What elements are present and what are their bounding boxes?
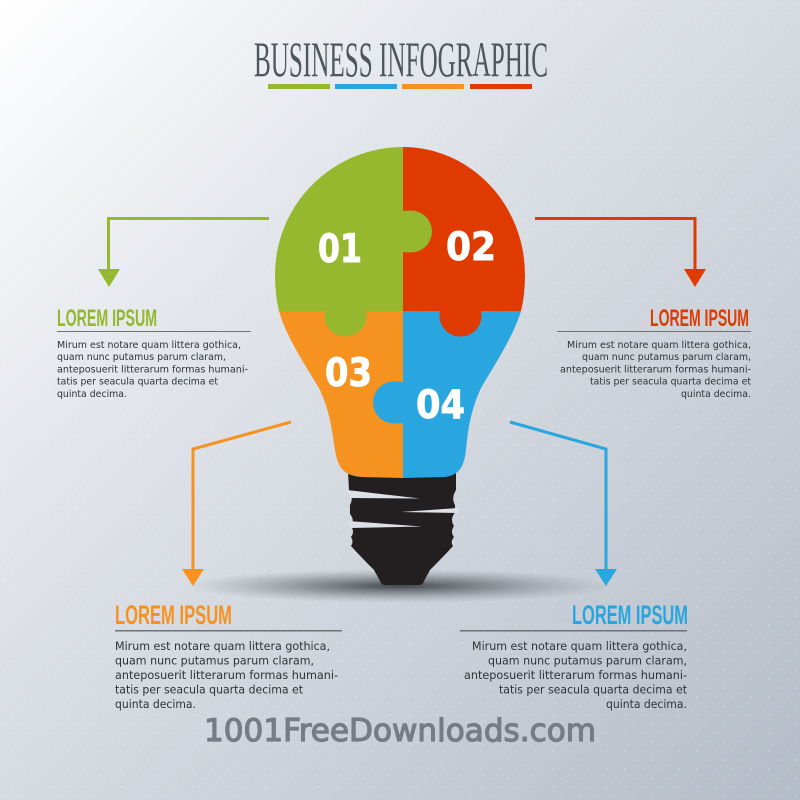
body text: tatis per seacula quarta decima et: [590, 376, 751, 388]
body text: [115, 639, 338, 711]
knob 04 into 03: [373, 382, 403, 424]
number 01: 01: [318, 227, 362, 272]
body text: quinta decima.: [115, 697, 196, 711]
heading: LOREM IPSUM: [57, 305, 157, 332]
body text: tatis per seacula quarta decima et: [499, 682, 687, 696]
heading: LOREM IPSUM: [115, 600, 232, 630]
lightbulb: [275, 147, 525, 585]
body text: Mirum est notare quam littera gothica,: [567, 340, 751, 351]
puzzle piece 02 red: [403, 147, 525, 311]
panel: orange text block: [115, 600, 342, 711]
arrow: orange: [182, 422, 291, 586]
knob 01 into 02: [403, 210, 432, 252]
body text: tatis per seacula quarta decima et: [115, 682, 303, 696]
knob 01 into 03: [324, 311, 366, 337]
panel: green text block: [57, 305, 251, 400]
body text: anteposuerit litterarum formas humani-: [57, 364, 248, 376]
arrow: green: [98, 218, 269, 287]
number 03: 03: [325, 351, 372, 396]
body text: quinta decima.: [606, 697, 687, 711]
body text: tatis per seacula quarta decima et: [57, 376, 218, 388]
number 04: 04: [416, 383, 465, 428]
body text: [464, 639, 687, 711]
body text: quam nunc putamus parum claram,: [488, 654, 687, 668]
arrow: red: [535, 218, 706, 287]
puzzle piece 03 orange: [279, 311, 403, 478]
body text: anteposuerit litterarum formas humani-: [560, 364, 751, 376]
watermark: 1001FreeDownloads.com: [204, 713, 596, 749]
body text: quam nunc putamus parum claram,: [57, 352, 226, 363]
body text: quam nunc putamus parum claram,: [115, 654, 314, 668]
panel: red text block: [557, 305, 751, 400]
title colour bars: [268, 84, 532, 89]
puzzle piece 04 blue: [403, 311, 521, 478]
panel: blue text block: [460, 600, 688, 711]
body text: anteposuerit litterarum formas humani-: [115, 668, 338, 682]
knob 02 into 04: [439, 311, 482, 337]
body text: anteposuerit litterarum formas humani-: [464, 668, 687, 682]
arrow: blue: [510, 422, 617, 586]
body text: Mirum est notare quam littera gothica,: [115, 639, 330, 653]
heading: LOREM IPSUM: [572, 600, 688, 630]
number 02: 02: [446, 225, 496, 270]
body text: quinta decima.: [681, 389, 751, 400]
body text: quinta decima.: [57, 389, 127, 400]
body text: [57, 340, 248, 400]
puzzle piece 01 green: [275, 147, 403, 311]
body text: [560, 340, 751, 400]
bulb base: [347, 472, 458, 585]
floor shadow: [185, 569, 615, 603]
body text: Mirum est notare quam littera gothica,: [472, 639, 687, 653]
body text: quam nunc putamus parum claram,: [582, 352, 751, 363]
body text: Mirum est notare quam littera gothica,: [57, 340, 241, 351]
